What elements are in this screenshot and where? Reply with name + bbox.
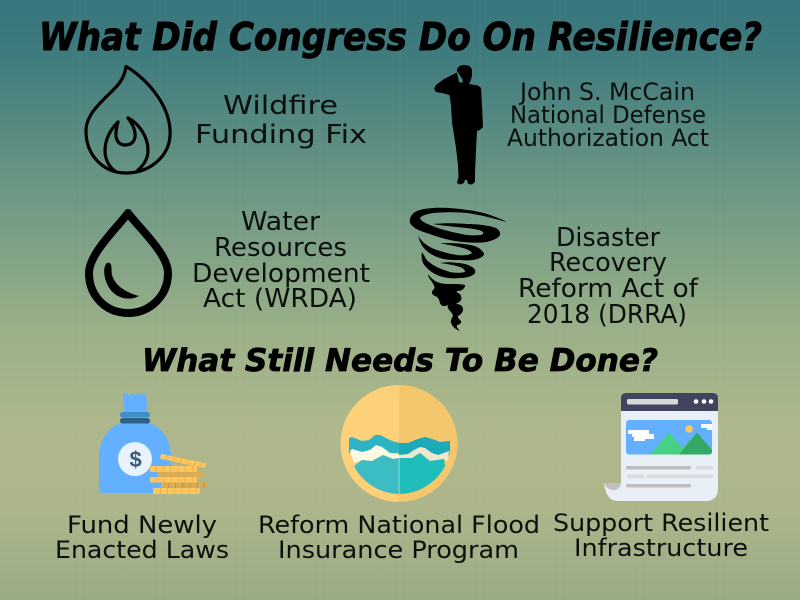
text: wrda: Resources <box>214 233 347 263</box>
text: john s mccain ndaa: Authorization Act <box>507 124 709 152</box>
text: drra: Disaster <box>556 223 660 253</box>
text: support resilient infrastructure: Support Resilient <box>553 509 769 537</box>
icon: money bag with coins: $ <box>130 447 142 472</box>
text: support resilient infrastructure <box>553 509 769 562</box>
text: wildfire funding fix: Wildfire <box>223 91 338 121</box>
text: drra <box>518 223 699 330</box>
icon: wildfire flame <box>86 66 170 173</box>
text: wrda: Act (WRDA) <box>203 284 357 314</box>
text: wrda: Development <box>192 259 370 289</box>
heading: what still needs to be done: What Still Needs To Be Done? <box>142 343 658 379</box>
icon: flood insurance circle <box>341 385 458 502</box>
text: reform nfip: Reform National Flood <box>258 511 540 539</box>
icon: water drop <box>89 213 168 313</box>
text: john s mccain ndaa: John S. McCain <box>518 78 695 106</box>
text: wildfire funding fix: Funding Fix <box>195 120 367 150</box>
text: fund newly enacted laws <box>55 511 229 564</box>
text: reform nfip <box>258 511 540 564</box>
text: wrda: Water <box>241 207 320 237</box>
text: wildfire funding fix <box>195 91 367 150</box>
icon: web page document <box>604 393 718 501</box>
text: fund newly enacted laws: Enacted Laws <box>55 536 229 564</box>
icon: money bag with coins <box>99 393 208 494</box>
text: fund newly enacted laws: Fund Newly <box>67 511 217 539</box>
icon: tornado <box>410 208 507 331</box>
text: reform nfip: Insurance Program <box>278 536 519 564</box>
text: drra: 2018 (DRRA) <box>527 300 687 330</box>
text: wrda <box>192 207 370 314</box>
text: john s mccain ndaa <box>507 78 709 152</box>
icon: saluting soldier <box>434 65 483 184</box>
text: support resilient infrastructure: Infrastructure <box>574 534 748 562</box>
text: john s mccain ndaa: National Defense <box>510 101 706 129</box>
text: drra: Reform Act of <box>518 274 699 304</box>
text: drra: Recovery <box>549 248 667 278</box>
